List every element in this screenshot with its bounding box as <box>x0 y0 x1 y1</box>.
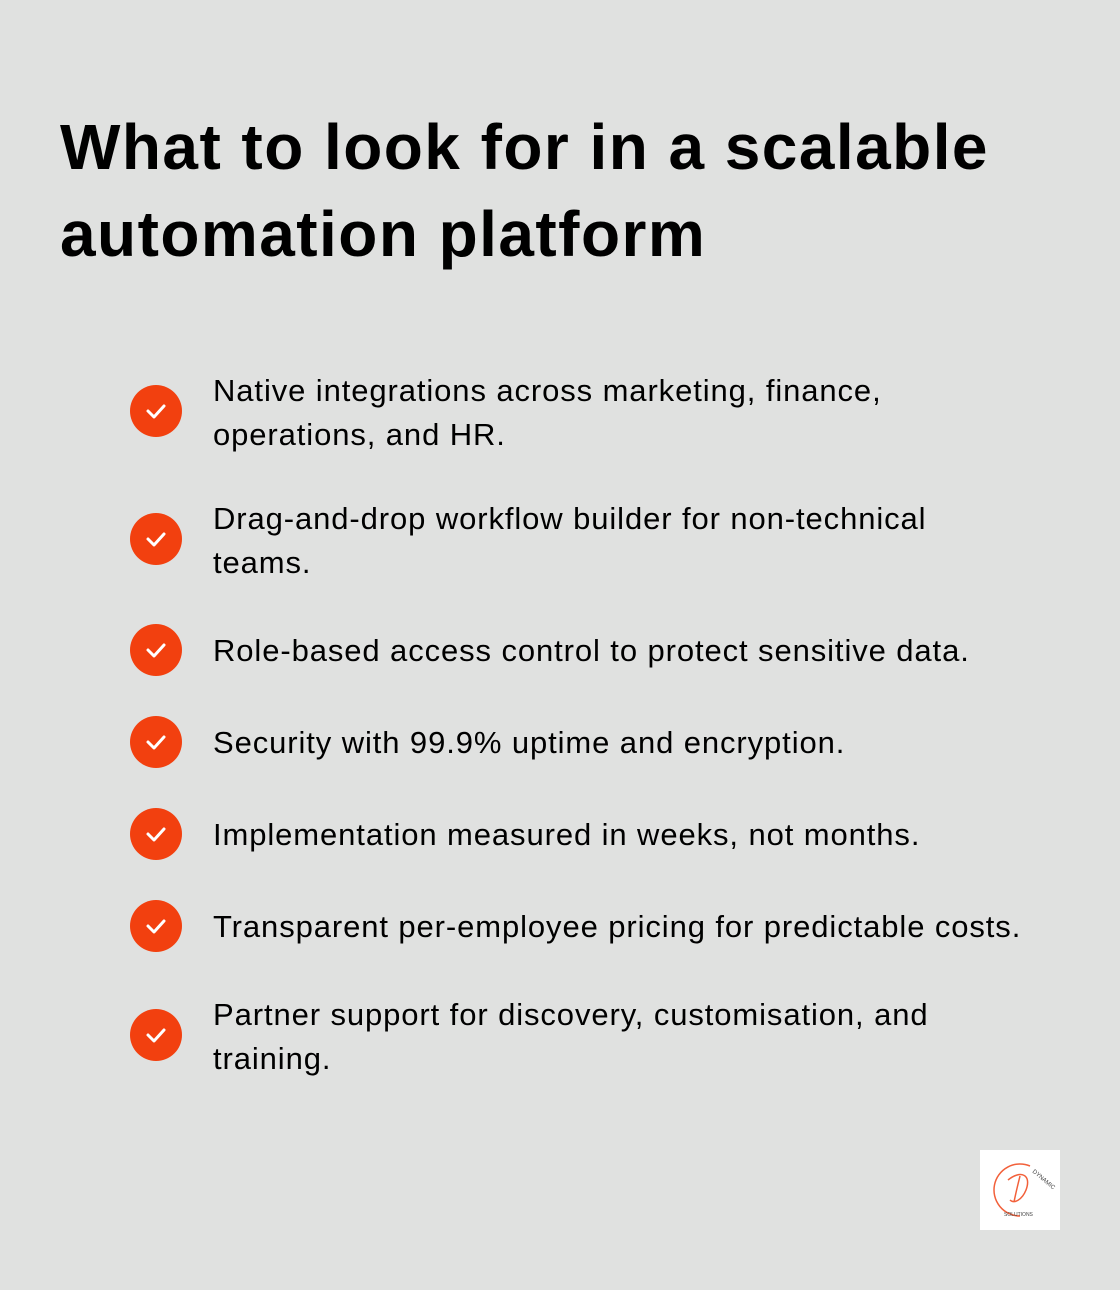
text: training. <box>213 1041 331 1076</box>
text <box>213 997 929 1076</box>
item: role-based access <box>130 624 970 676</box>
title: What to look for in a scalable <box>60 111 989 183</box>
icon: check <box>130 624 182 676</box>
text: Transparent per-employee pricing for predictable costs. <box>213 909 1021 944</box>
item: security <box>130 716 845 768</box>
text: Implementation measured in weeks, not months. <box>213 817 920 852</box>
text: Role-based access control to protect sensitive data. <box>213 633 970 668</box>
item: implementation <box>130 808 920 860</box>
item: pricing <box>130 900 1021 952</box>
text <box>213 501 926 580</box>
item: native integrations <box>130 373 882 452</box>
icon: check <box>130 808 182 860</box>
title: automation platform <box>60 198 706 270</box>
item: drag-and-drop <box>130 501 926 580</box>
text: Partner support for discovery, customisation, and <box>213 997 929 1032</box>
text: operations, and HR. <box>213 417 506 452</box>
icon: check <box>130 513 182 565</box>
logo <box>980 1150 1060 1230</box>
icon: check <box>130 1009 182 1061</box>
text <box>213 373 882 452</box>
title <box>60 111 989 270</box>
icon: check <box>130 385 182 437</box>
logo: DYNAMIC <box>1031 1169 1056 1192</box>
text: teams. <box>213 545 311 580</box>
icon: check <box>130 716 182 768</box>
text: Security with 99.9% uptime and encryption. <box>213 725 845 760</box>
text: Drag-and-drop workflow builder for non-technical <box>213 501 926 536</box>
logo: SOLUTIONS <box>1004 1212 1034 1218</box>
icon: check <box>130 900 182 952</box>
text: Native integrations across marketing, finance, <box>213 373 882 408</box>
item: partner support <box>130 997 929 1076</box>
